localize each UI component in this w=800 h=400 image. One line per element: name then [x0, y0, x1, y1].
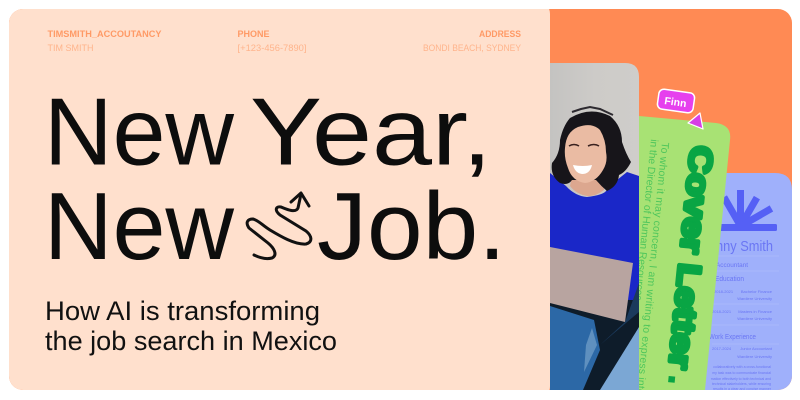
resume text: nny Smith — [716, 238, 773, 255]
contact address: BONDI BEACH, SYDNEY — [423, 43, 521, 53]
sweater — [550, 172, 639, 300]
panel: peach main panel — [0, 0, 550, 400]
smile — [573, 165, 592, 174]
panel: green cover letter — [639, 116, 730, 390]
cover letter body text: in the Director of Human Resources — [632, 139, 660, 301]
contact phone — [238, 29, 306, 53]
sunglasses on head — [572, 107, 613, 115]
cover letter title: Cover Letter — [662, 144, 720, 371]
subtitle: How AI is transforming — [45, 296, 320, 326]
resume text: Wardiere University — [737, 316, 772, 321]
title: New — [44, 78, 235, 186]
laptop — [550, 247, 633, 322]
resume text: collaboratively with a cross-functional — [713, 365, 771, 369]
contact address: ADDRESS — [479, 29, 521, 39]
resume text: results in a clear and concise manner — [713, 387, 772, 391]
neck — [570, 180, 604, 196]
resume text: Wardiere University — [737, 296, 772, 301]
subtitle — [45, 296, 337, 356]
resume text: technical stakeholders, while ensuring — [712, 382, 771, 386]
icon: sunburst logo — [720, 190, 777, 231]
cover letter title: . — [658, 372, 708, 389]
resume text: my task was to communicate financial — [712, 371, 771, 375]
contact phone: PHONE — [238, 29, 270, 39]
resume text — [709, 238, 773, 391]
resume text: 2018-2021 — [712, 309, 732, 314]
title: New — [44, 173, 235, 280]
resume text: 2017-2024 — [712, 346, 732, 351]
subtitle: the job search in Mexico — [45, 326, 337, 356]
panel: photo of smiling woman — [550, 63, 640, 393]
title: Job. — [317, 173, 506, 280]
title: Year, — [250, 78, 492, 186]
resume text: Masters in Finance — [738, 309, 773, 314]
resume text: Junior Accountant — [740, 346, 773, 351]
icon: squiggle arrow — [247, 193, 311, 259]
contact name — [48, 30, 162, 51]
jeans — [550, 300, 639, 390]
contact address — [423, 29, 521, 53]
resume text: Education — [715, 274, 744, 283]
hair — [552, 111, 631, 191]
eyes — [569, 144, 599, 146]
resume text: Wardiere University — [737, 354, 772, 359]
contact name: TIMSMITH_ACCOUTANCY — [48, 29, 162, 39]
resume text: Accountant — [716, 262, 748, 269]
panel: blue resume card — [705, 173, 792, 390]
resume text: Work Experience — [709, 332, 756, 341]
resume text: 2018-2021 — [714, 289, 734, 294]
resume text: mation effectively to both technical and — [711, 377, 771, 381]
tag: Finn cursor: Finn — [664, 95, 687, 110]
contact name: TIM SMITH — [48, 43, 94, 53]
face — [565, 125, 607, 183]
title — [52, 98, 497, 260]
resume text: Bachelor Finance — [741, 289, 773, 294]
tag: Finn cursor — [657, 89, 703, 129]
contact phone: [+123-456-7890] — [238, 43, 306, 53]
